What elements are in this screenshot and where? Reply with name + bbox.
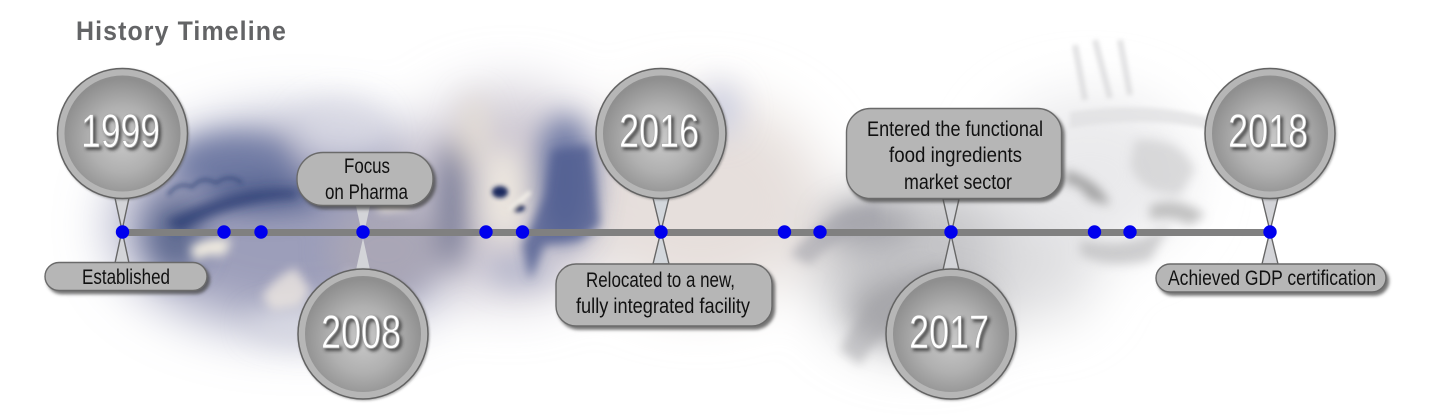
callout: Established: Established: [82, 265, 170, 289]
background: faded ornamental carving photo: [115, 40, 1210, 365]
year badge: 2017: 2017: [909, 305, 989, 358]
callout: Entered functional food: [846, 108, 1062, 198]
year badge: 2016: 2016: [619, 104, 699, 157]
callout: Relocated: Relocated to a new,: [586, 268, 735, 292]
year badge: 2008: 2008: [321, 305, 401, 358]
heading: History Timeline: [76, 16, 287, 46]
callout: Focus on Pharma: [297, 152, 433, 206]
connector: 1999: [115, 198, 129, 263]
callout: Relocated: [556, 264, 772, 326]
callout: Entered functional food: Entered the functional: [867, 117, 1043, 141]
connector: 2008: [356, 206, 370, 270]
callout: Achieved GDP certification: Achieved GDP certification: [1168, 266, 1376, 290]
connector: 2016: [653, 198, 669, 264]
milestone dots: [116, 225, 1277, 239]
timeline bar: [122, 229, 1270, 236]
year badge: 2018: [1205, 68, 1335, 198]
connector: 2018: [1262, 198, 1278, 264]
callout: Relocated: fully integrated facility: [576, 294, 750, 318]
year badge: 1999: [58, 68, 188, 198]
year badge: 1999: 1999: [81, 104, 160, 157]
year badge: 2017: [886, 269, 1016, 399]
year badge: 2008: [298, 269, 428, 399]
year badge: 2018: 2018: [1228, 104, 1308, 157]
callout: Entered functional food: food ingredients: [889, 143, 1022, 167]
callout: Focus on Pharma: on Pharma: [325, 180, 408, 204]
callout: Focus on Pharma: Focus: [344, 154, 390, 178]
callout: Entered functional food: market sector: [904, 170, 1012, 194]
callout: Established: [45, 262, 207, 290]
connector: 2017: [943, 199, 959, 270]
year badge: 2016: [596, 68, 726, 198]
